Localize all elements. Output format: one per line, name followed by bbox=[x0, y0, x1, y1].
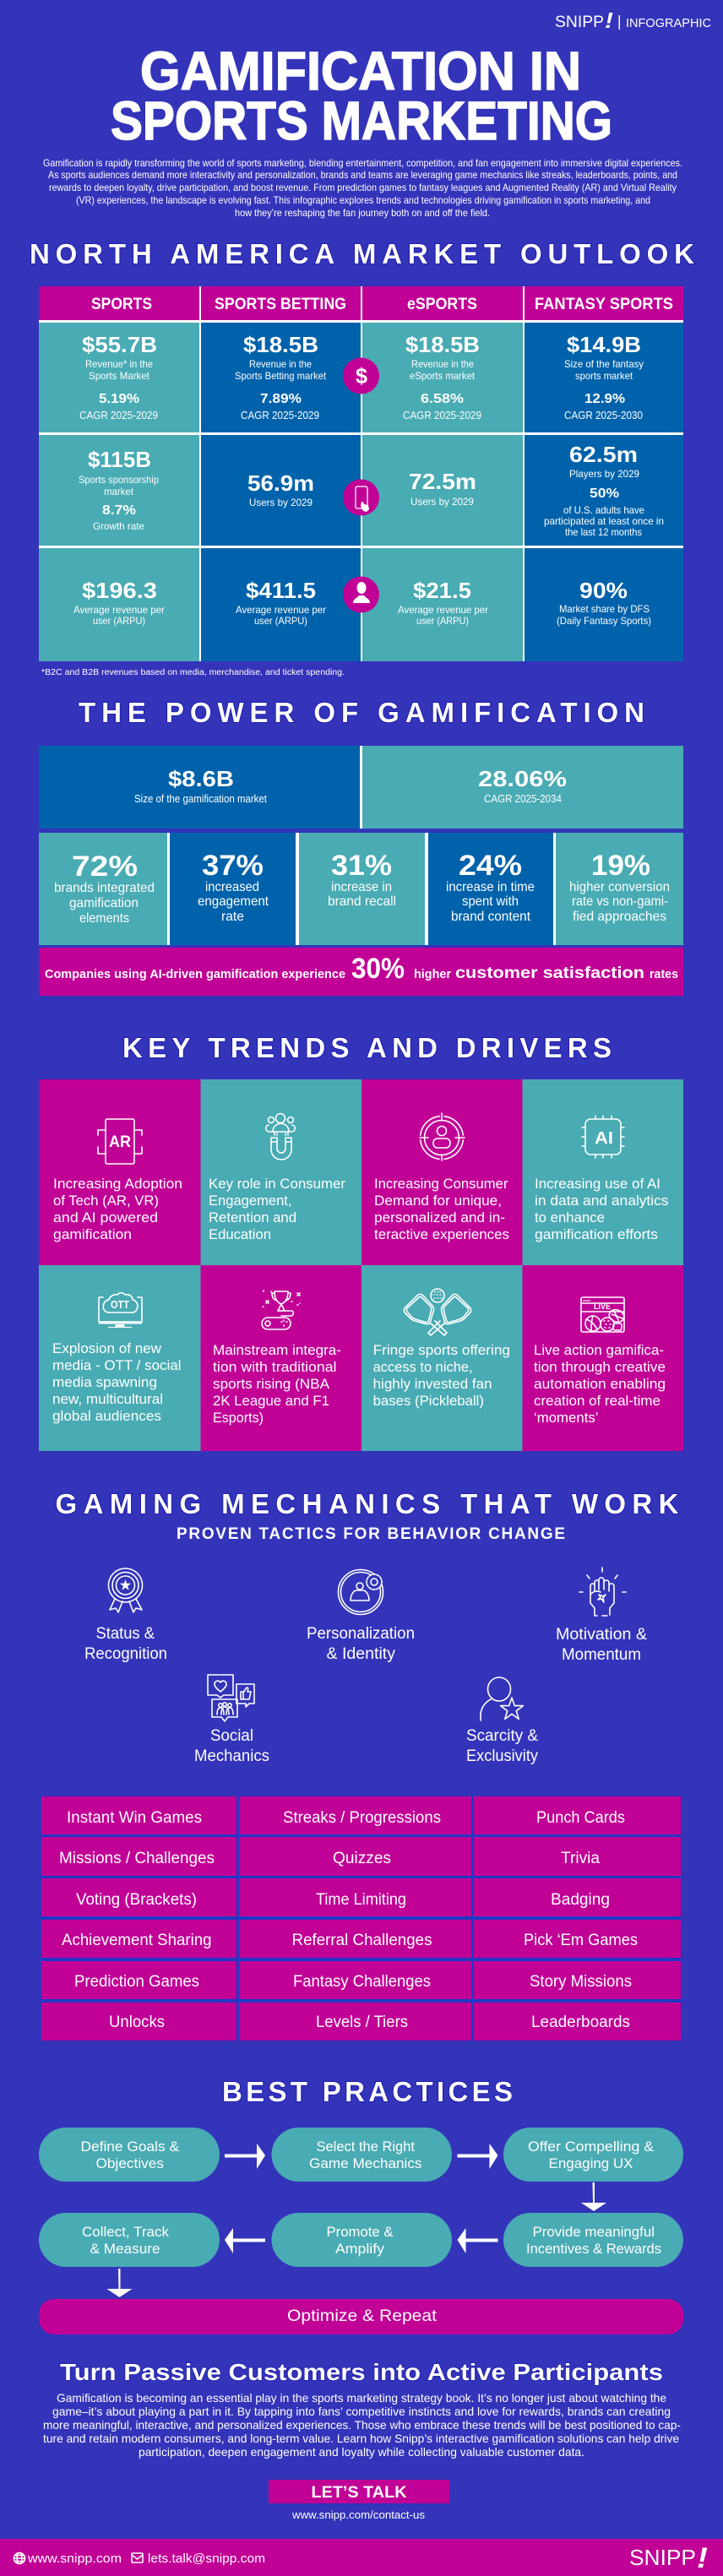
cell: betting arpu: $411.5 bbox=[246, 578, 316, 603]
tactics row 1 bbox=[41, 1796, 681, 1834]
trend: live action: ‘moments’ bbox=[534, 1410, 598, 1426]
cell: sponsorship: Growth rate bbox=[93, 520, 144, 532]
arrow: step 5 to 6 bbox=[225, 2228, 265, 2253]
cell: sponsorship: 8.7% bbox=[102, 503, 136, 518]
callout banner: AI-driven satisfaction: Companies using AI-driven gamification experience bbox=[45, 967, 345, 981]
mechanic: personalization and identity: & Identity bbox=[326, 1645, 396, 1663]
panel: power of gamification stats bbox=[39, 746, 683, 996]
cell: esports revenue: CAGR 2025-2029 bbox=[403, 409, 481, 421]
cell: betting revenue: $18.5B bbox=[243, 332, 318, 357]
trend: consumer demand: Demand for unique, bbox=[374, 1193, 502, 1209]
trend: fringe sports: Fringe sports offering bbox=[373, 1342, 510, 1358]
cell: fantasy size bbox=[525, 323, 683, 432]
callout banner: AI-driven satisfaction: rates bbox=[650, 967, 678, 981]
icon: raised fist bbox=[579, 1568, 626, 1616]
stat: market size bbox=[39, 746, 360, 829]
step: optimize and repeat bbox=[39, 2299, 683, 2334]
icon: target person bbox=[420, 1113, 465, 1160]
tactics row 2 bbox=[41, 1837, 681, 1876]
cell: fantasy players: 50% bbox=[590, 486, 619, 501]
cell: sports arpu bbox=[39, 548, 199, 661]
tactics row 5: Story Missions bbox=[530, 1973, 632, 1991]
cell: betting revenue bbox=[201, 323, 361, 432]
table header row: SPORTS bbox=[91, 296, 152, 313]
intro paragraph bbox=[43, 157, 682, 219]
stat: 72%: 72% bbox=[72, 851, 138, 883]
cell: betting revenue: Revenue in the bbox=[249, 358, 312, 370]
step: collect and measure: & Measure bbox=[90, 2241, 160, 2257]
table header row bbox=[39, 286, 683, 320]
tactics row 1: Instant Win Games bbox=[67, 1809, 202, 1827]
trend: live action: Live action gamifica- bbox=[534, 1342, 664, 1358]
cell: sports revenue: Sports Market bbox=[89, 370, 150, 382]
cell: esports revenue: eSports market bbox=[410, 370, 476, 382]
stat: 24% bbox=[428, 833, 553, 945]
mechanic: personalization and identity bbox=[307, 1569, 415, 1663]
mechanic: personalization and identity: Personalization bbox=[307, 1625, 415, 1643]
cell: dfs market share: (Daily Fantasy Sports) bbox=[557, 615, 651, 627]
step: define goals: Objectives bbox=[96, 2155, 164, 2171]
contact url: www.snipp.com/contact-us bbox=[291, 2508, 425, 2521]
icon: ribbon badge bbox=[108, 1568, 142, 1612]
stat: market size: $8.6B bbox=[168, 766, 234, 791]
trend: AR VR adoption: of Tech (AR, VR) bbox=[53, 1193, 159, 1209]
step: promote bbox=[272, 2213, 452, 2267]
title bbox=[111, 41, 612, 151]
cell: fantasy size: $14.9B bbox=[567, 332, 641, 357]
cell: esports users: Users by 2029 bbox=[410, 496, 474, 508]
step: optimize and repeat: Optimize & Repeat bbox=[287, 2307, 438, 2325]
cell: sports arpu: Average revenue per bbox=[73, 604, 165, 616]
step: select mechanics: Select the Right bbox=[316, 2139, 415, 2155]
heading: gaming mechanics that work: GAMING MECHANICS THAT WORK bbox=[56, 1488, 679, 1519]
cell: fantasy size: Size of the fantasy bbox=[564, 358, 644, 370]
trend: AR VR adoption: Increasing Adoption bbox=[53, 1176, 182, 1192]
mechanic: status and recognition bbox=[84, 1568, 167, 1663]
cell: fantasy players bbox=[525, 435, 683, 546]
cell: fantasy size: sports market bbox=[575, 370, 633, 382]
tactics row 2: Trivia bbox=[561, 1850, 600, 1867]
cell: sponsorship: Sports sponsorship bbox=[79, 474, 159, 486]
arrow: step 4 to 5 bbox=[458, 2228, 498, 2253]
arrow: step 1 to 2 bbox=[225, 2144, 265, 2169]
icon: user badge bbox=[343, 576, 379, 613]
mechanic: social mechanics: Mechanics bbox=[194, 1747, 269, 1765]
cell: fantasy players: 62.5m bbox=[569, 442, 638, 467]
cell: dfs market share: 90% bbox=[579, 578, 628, 603]
closing paragraph: more meaningful, interactive, and personalized experiences. Those who embrace these trends will be best positioned to cap- bbox=[43, 2418, 681, 2432]
icon: dollar badge: $ bbox=[356, 363, 368, 389]
trend: consumer demand: personalized and in- bbox=[374, 1209, 505, 1226]
cell: sports arpu: user (ARPU) bbox=[93, 615, 145, 627]
trend: fringe sports: bases (Pickleball) bbox=[373, 1393, 484, 1409]
callout banner: AI-driven satisfaction: customer satisfaction bbox=[455, 965, 644, 982]
step: define goals: Define Goals & bbox=[81, 2139, 180, 2155]
flow: best practices process bbox=[39, 2128, 683, 2334]
icon: dollar badge bbox=[343, 358, 379, 394]
mechanic: scarcity and exclusivity bbox=[466, 1677, 538, 1765]
cell: esports revenue: $18.5B bbox=[405, 332, 480, 357]
trend: AI in data: Increasing use of AI bbox=[535, 1176, 660, 1192]
cell: sports revenue: 5.19% bbox=[99, 392, 139, 406]
panel: tactics grid bbox=[41, 1796, 681, 2041]
icon: person with star bbox=[481, 1677, 523, 1720]
icon: live sports window bbox=[581, 1297, 626, 1332]
tactics row 2: Quizzes bbox=[333, 1850, 391, 1867]
cell: esports arpu: user (ARPU) bbox=[416, 615, 469, 627]
tactics row 1: Streaks / Progressions bbox=[283, 1809, 441, 1827]
trend: consumer engagement: Education bbox=[209, 1226, 271, 1242]
closing paragraph bbox=[43, 2391, 681, 2459]
cell: esports arpu: $21.5 bbox=[413, 578, 471, 603]
cell: betting users: 56.9m bbox=[247, 470, 314, 496]
cell: sports revenue: CAGR 2025-2029 bbox=[79, 409, 158, 421]
stat: 37% bbox=[170, 833, 296, 945]
intro paragraph: (VR) experiences, the landscape is evolving fast. This infographic explores trends and technologies driving gamification in sports marketing, and bbox=[76, 194, 650, 206]
stat: 19%: higher conversion bbox=[569, 880, 670, 894]
logo: Snipp infographic: INFOGRAPHIC bbox=[626, 16, 711, 30]
icon: AI chip bbox=[582, 1116, 624, 1158]
step: offer UX bbox=[503, 2128, 683, 2182]
cell: fantasy players: of U.S. adults have bbox=[563, 504, 644, 516]
stat: 24%: spent with bbox=[462, 894, 519, 909]
stat: gamification cagr: CAGR 2025-2034 bbox=[484, 792, 562, 805]
trend: consumer engagement: Key role in Consumer bbox=[209, 1176, 345, 1192]
footnote: *B2C and B2B revenues based on media, merchandise, and ticket spending. bbox=[41, 668, 345, 677]
icon: globe bbox=[14, 2552, 25, 2564]
trend: new media OTT: media - OTT / social bbox=[52, 1357, 181, 1373]
cell: dfs market share: Market share by DFS bbox=[559, 603, 650, 615]
logo: Snipp footer: ! bbox=[697, 2542, 708, 2574]
tactics row 6: Leaderboards bbox=[531, 2014, 630, 2031]
stat: 37%: 37% bbox=[202, 850, 264, 882]
logo: Snipp infographic bbox=[555, 8, 711, 33]
trend: fringe sports: highly invested fan bbox=[373, 1376, 492, 1392]
tactics row 4: Pick ‘Em Games bbox=[524, 1932, 638, 1949]
cell: esports revenue bbox=[362, 323, 523, 432]
cell: dfs market share bbox=[525, 548, 683, 661]
cell: betting users bbox=[201, 435, 361, 546]
arrow: step 3 to 4 bbox=[581, 2182, 606, 2211]
trend: consumer demand: teractive experiences bbox=[374, 1226, 509, 1242]
stat: gamification cagr: 28.06% bbox=[478, 766, 567, 791]
step: collect and measure bbox=[39, 2213, 220, 2267]
tactics row 4 bbox=[41, 1920, 681, 1958]
logo: Snipp footer bbox=[629, 2542, 708, 2574]
trend: consumer engagement: Retention and bbox=[209, 1209, 296, 1226]
stat: 37%: increased bbox=[205, 880, 259, 894]
step: incentives bbox=[503, 2213, 683, 2267]
cell: fantasy players: the last 12 months bbox=[565, 526, 642, 538]
trend: live action bbox=[522, 1265, 683, 1451]
stat: market size: Size of the gamification market bbox=[134, 792, 267, 805]
stat: 31% bbox=[299, 833, 425, 945]
title: GAMIFICATION IN bbox=[140, 41, 581, 101]
trend: AI in data: in data and analytics bbox=[535, 1193, 669, 1209]
icon: live sports window: LIVE bbox=[594, 1302, 611, 1312]
trend: mainstream integration: tion with traditional bbox=[213, 1359, 336, 1375]
trend: new media OTT: Explosion of new bbox=[52, 1340, 162, 1356]
table header row: FANTASY SPORTS bbox=[535, 296, 673, 313]
step: offer UX: Engaging UX bbox=[549, 2155, 633, 2171]
heading: turn passive customers: Turn Passive Customers into Active Participants bbox=[60, 2359, 663, 2385]
step: promote: Promote & bbox=[326, 2224, 394, 2240]
callout banner: AI-driven satisfaction: 30% bbox=[351, 953, 405, 985]
mechanic: scarcity and exclusivity: Exclusivity bbox=[466, 1747, 538, 1765]
trend: mainstream integration bbox=[201, 1265, 362, 1451]
closing paragraph: participation, deepen engagement and loyalty while collecting valuable customer data. bbox=[139, 2445, 584, 2459]
arrow: step 2 to 3 bbox=[458, 2144, 498, 2169]
icon: social bubbles bbox=[208, 1675, 254, 1721]
tactics row 6: Unlocks bbox=[109, 2014, 165, 2031]
step: collect and measure: Collect, Track bbox=[82, 2224, 169, 2240]
trend: AI in data: to enhance bbox=[535, 1209, 605, 1226]
title: SPORTS MARKETING bbox=[111, 90, 612, 151]
footer bar: www.snipp.com bbox=[27, 2552, 122, 2566]
trend: AR VR adoption: and AI powered bbox=[53, 1209, 158, 1226]
cell: betting users: Users by 2029 bbox=[249, 497, 313, 508]
trend: mainstream integration: Mainstream integra- bbox=[213, 1342, 341, 1358]
cell: betting revenue: Sports Betting market bbox=[235, 370, 327, 382]
footer bar bbox=[0, 2539, 723, 2576]
cell: sports revenue bbox=[39, 323, 199, 432]
trend: live action: automation enabling bbox=[534, 1376, 666, 1392]
cell: esports users bbox=[362, 435, 523, 546]
heading: north america market outlook: NORTH AMERICA MARKET OUTLOOK bbox=[30, 238, 694, 269]
trend: live action: tion through creative bbox=[534, 1359, 666, 1375]
tactics row 3: Badging bbox=[551, 1891, 610, 1909]
stat: 24%: 24% bbox=[459, 850, 522, 882]
tactics row 2: Missions / Challenges bbox=[59, 1850, 215, 1867]
button: let's talk bbox=[269, 2480, 449, 2503]
tactics row 6: Levels / Tiers bbox=[316, 2014, 408, 2031]
trend: consumer engagement bbox=[201, 1079, 362, 1265]
mechanic: scarcity and exclusivity: Scarcity & bbox=[466, 1727, 538, 1745]
tactics row 4: Referral Challenges bbox=[292, 1932, 432, 1949]
cell: sports revenue: Revenue* in the bbox=[85, 358, 153, 370]
step: incentives: Provide meaningful bbox=[532, 2224, 655, 2240]
trend: AR VR adoption: gamification bbox=[53, 1226, 132, 1242]
trend: new media OTT: global audiences bbox=[52, 1408, 161, 1424]
cell: sports arpu: $196.3 bbox=[82, 578, 157, 603]
mechanic: motivation and momentum: Momentum bbox=[562, 1646, 641, 1664]
icon: AR phone bbox=[98, 1119, 142, 1164]
trend: mainstream integration: sports rising (NBA bbox=[213, 1376, 330, 1392]
cell: esports revenue: 6.58% bbox=[421, 392, 464, 406]
trend: AR VR adoption bbox=[39, 1079, 201, 1265]
table header row: SPORTS BETTING bbox=[215, 296, 346, 313]
icon: phone badge bbox=[343, 480, 379, 515]
stat: 19%: fied approaches bbox=[573, 910, 666, 924]
stat: 31%: brand recall bbox=[328, 894, 396, 909]
tactics row 5: Fantasy Challenges bbox=[293, 1973, 431, 1991]
mechanic: status and recognition: Recognition bbox=[84, 1645, 167, 1663]
closing paragraph: Gamification is becoming an essential play in the sports marketing strategy book. It’s no longer just about watching the bbox=[57, 2391, 666, 2405]
trend: AI in data bbox=[522, 1079, 683, 1265]
step: select mechanics: Game Mechanics bbox=[309, 2155, 422, 2171]
cell: fantasy players: participated at least once in bbox=[544, 515, 664, 527]
cell: betting revenue: CAGR 2025-2029 bbox=[241, 409, 319, 421]
cell: betting revenue: 7.89% bbox=[260, 392, 302, 406]
trend: mainstream integration: Esports) bbox=[213, 1410, 264, 1426]
trend: new media OTT: media spawning bbox=[52, 1374, 157, 1390]
tactics row 3: Voting (Brackets) bbox=[76, 1891, 197, 1909]
heading: the power of gamification: THE POWER OF GAMIFICATION bbox=[79, 697, 644, 728]
stat: 72%: gamification bbox=[69, 896, 139, 910]
icon: AR phone: AR bbox=[109, 1133, 131, 1151]
cell: sponsorship: $115B bbox=[88, 447, 151, 472]
cell: esports revenue: Revenue in the bbox=[411, 358, 474, 370]
icon: AI chip: AI bbox=[595, 1129, 613, 1148]
cell: sports revenue: $55.7B bbox=[82, 332, 157, 357]
cell: betting arpu bbox=[201, 548, 361, 661]
callout banner: AI-driven satisfaction bbox=[39, 948, 683, 996]
tactics row 3 bbox=[41, 1878, 681, 1916]
tactics row 6 bbox=[41, 2003, 681, 2041]
stat: 19% bbox=[556, 833, 683, 945]
stat: 31%: increase in bbox=[331, 880, 392, 894]
table header row: eSPORTS bbox=[407, 296, 477, 313]
cell: sponsorship bbox=[39, 435, 199, 546]
stat: 72%: brands integrated bbox=[54, 881, 155, 895]
mechanic: status and recognition: Status & bbox=[96, 1625, 155, 1643]
heading: key trends and drivers: KEY TRENDS AND DRIVERS bbox=[122, 1032, 612, 1063]
cell: esports arpu bbox=[362, 548, 523, 661]
tactics row 1: Punch Cards bbox=[536, 1809, 625, 1827]
icon: people and magnet bbox=[266, 1113, 295, 1160]
cell: betting arpu: user (ARPU) bbox=[254, 615, 307, 627]
mechanic: social mechanics: Social bbox=[210, 1727, 253, 1745]
trend: new media OTT: new, multicultural bbox=[52, 1391, 163, 1407]
stat: 72%: elements bbox=[79, 911, 129, 926]
trend: new media OTT bbox=[39, 1265, 201, 1451]
tactics row 5 bbox=[41, 1961, 681, 1999]
trend: consumer engagement: Engagement, bbox=[209, 1193, 292, 1209]
step: incentives: Incentives & Rewards bbox=[526, 2241, 661, 2257]
button: let's talk: LET’S TALK bbox=[311, 2484, 407, 2502]
tactics row 3: Time Limiting bbox=[316, 1891, 406, 1909]
logo: Snipp infographic: SNIPP bbox=[555, 14, 604, 31]
panel: key trends grid bbox=[39, 1079, 683, 1451]
trend: live action: creation of real-time bbox=[534, 1393, 660, 1409]
mechanic: social mechanics bbox=[194, 1675, 269, 1765]
logo: Snipp infographic: ! bbox=[605, 8, 613, 33]
cell: esports users: 72.5m bbox=[409, 469, 476, 494]
icon: trophy and gamepad bbox=[262, 1291, 300, 1329]
closing paragraph: ture and retain modern consumers, and long-term value. Learn how Snipp’s interactive gamification solutions can help drive bbox=[43, 2432, 679, 2445]
cell: sponsorship: market bbox=[104, 486, 134, 497]
stat: 37%: rate bbox=[221, 910, 244, 924]
icon: person in gear ring bbox=[338, 1569, 383, 1615]
cell: betting arpu: Average revenue per bbox=[236, 604, 326, 616]
intro paragraph: how they’re reshaping the fan journey both on and off the field. bbox=[235, 207, 490, 219]
tactics row 4: Achievement Sharing bbox=[62, 1932, 211, 1949]
cell: esports arpu: Average revenue per bbox=[398, 604, 488, 616]
market outlook table bbox=[39, 286, 683, 661]
stat: 37%: engagement bbox=[198, 894, 269, 909]
cell: fantasy players: Players by 2029 bbox=[569, 468, 639, 480]
logo: Snipp footer: SNIPP bbox=[629, 2545, 696, 2570]
trend: fringe sports bbox=[362, 1265, 522, 1451]
stat: 31%: 31% bbox=[331, 850, 392, 882]
icon: OTT monitor bbox=[99, 1293, 142, 1328]
trend: mainstream integration: 2K League and F1 bbox=[213, 1393, 329, 1409]
stat: 19%: rate vs non-gami- bbox=[572, 894, 668, 909]
cell: fantasy size: 12.9% bbox=[584, 392, 625, 406]
stat: gamification cagr bbox=[362, 746, 683, 829]
mechanic: motivation and momentum bbox=[556, 1568, 647, 1664]
step: select mechanics bbox=[272, 2128, 452, 2182]
stat: 19%: 19% bbox=[591, 850, 650, 882]
trend: AI in data: gamification efforts bbox=[535, 1226, 658, 1242]
heading: best practices: BEST PRACTICES bbox=[222, 2076, 513, 2107]
step: define goals bbox=[39, 2128, 220, 2182]
arrow: step 6 to optimize bbox=[106, 2269, 132, 2297]
subheading: proven tactics: PROVEN TACTICS FOR BEHAVIOR CHANGE bbox=[177, 1525, 565, 1543]
cell: fantasy size: CAGR 2025-2030 bbox=[564, 409, 643, 421]
icon: envelope bbox=[132, 2553, 143, 2562]
footer bar: lets.talk@snipp.com bbox=[148, 2552, 265, 2566]
step: offer UX: Offer Compelling & bbox=[528, 2139, 655, 2155]
stat: 72% bbox=[39, 833, 167, 945]
tactics row 5: Prediction Games bbox=[74, 1973, 199, 1991]
stat: 24%: brand content bbox=[451, 910, 531, 924]
trend: consumer demand: Increasing Consumer bbox=[374, 1176, 508, 1192]
stat: 24%: increase in time bbox=[446, 880, 535, 894]
trend: consumer demand bbox=[362, 1079, 522, 1265]
mechanic: motivation and momentum: Motivation & bbox=[556, 1626, 647, 1644]
icon: pickleball paddles bbox=[404, 1289, 471, 1335]
callout banner: AI-driven satisfaction: higher bbox=[414, 967, 451, 981]
trend: fringe sports: access to niche, bbox=[373, 1359, 473, 1375]
icon: OTT monitor: OTT bbox=[111, 1298, 129, 1311]
closing paragraph: game–it’s about playing a part in it. By tapping into fans’ competitive instincts and love for rewards, brands can creating bbox=[52, 2405, 671, 2418]
step: promote: Amplify bbox=[335, 2241, 385, 2257]
